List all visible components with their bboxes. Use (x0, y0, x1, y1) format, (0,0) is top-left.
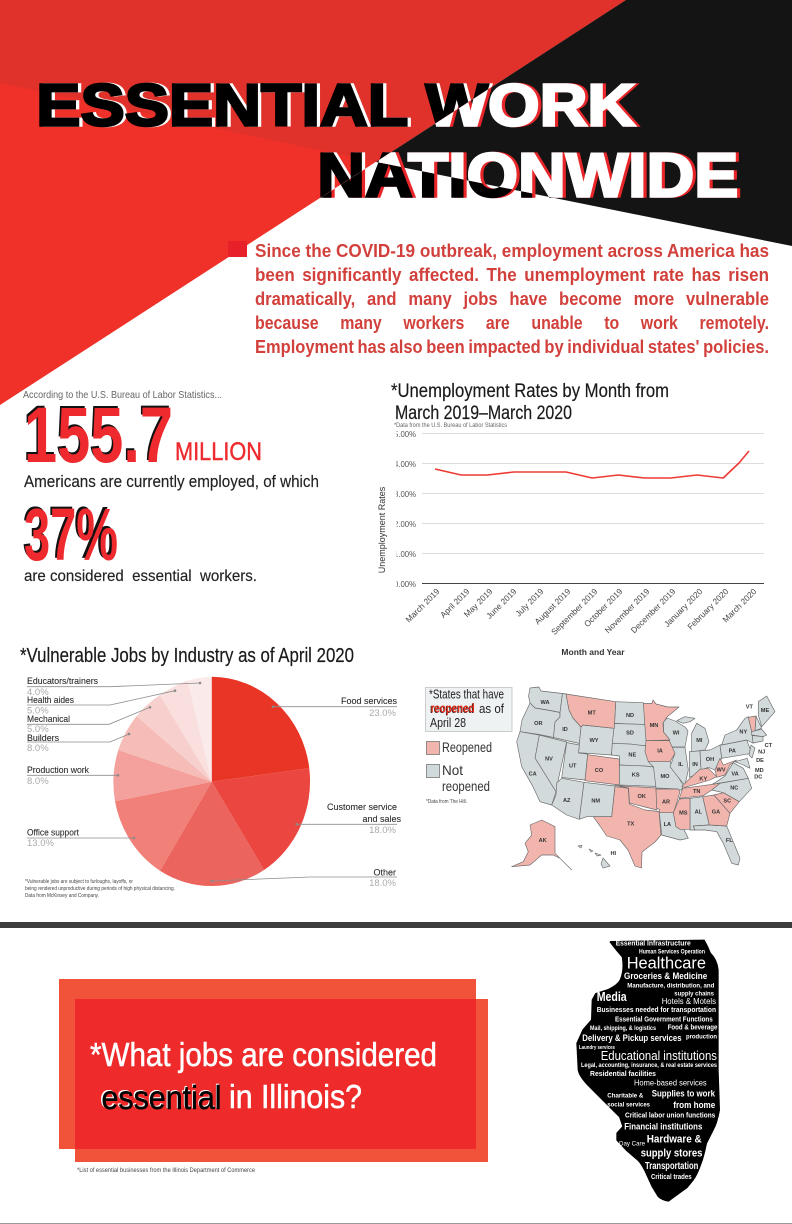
big number 37% (22, 491, 118, 576)
word cloud terms: Manufacture, distribution, and (627, 983, 714, 990)
state abbreviations: NV (545, 756, 553, 762)
state abbreviations: NJ (758, 750, 765, 756)
title: ESSENTIAL WORK (40, 73, 639, 139)
word cloud terms: Human Services Operation (639, 949, 705, 955)
essential workers sentence: are considered essential workers. (24, 568, 257, 585)
y axis labels: 0.00% (394, 579, 416, 589)
word cloud terms: production (686, 1033, 717, 1040)
pie label: educators/trainers: 4.0% (27, 687, 49, 698)
state abbreviations: TN (693, 789, 700, 795)
state abbreviations (529, 700, 773, 857)
gridlines and axis (422, 434, 764, 584)
word cloud terms: Food & beverage (668, 1024, 717, 1031)
word cloud terms: from home (673, 1100, 715, 1111)
legend: Not (442, 762, 463, 778)
word cloud terms: Transportation (645, 1161, 698, 1172)
pie label: mechanical: Mechanical (27, 714, 70, 724)
pie footnote (25, 879, 175, 899)
state abbreviations: SC (723, 799, 731, 805)
state abbreviations: NE (628, 752, 636, 758)
x axis labels: November 2019 (603, 586, 652, 635)
word cloud terms: Day Care (619, 1141, 645, 1148)
pie label: mechanical: 5.0% (27, 724, 49, 735)
pie label: health aides: 5.0% (27, 706, 49, 716)
state abbreviations: ME (761, 708, 769, 714)
title: NATIONWIDE (317, 142, 738, 211)
word cloud terms: Hotels & Motels (662, 997, 716, 1006)
pie label: food services (341, 696, 397, 719)
state abbreviations: AL (695, 810, 703, 816)
pie title: *Vulnerable Jobs by Industry as of April 2020 (20, 645, 354, 667)
state abbreviations: LA (664, 822, 671, 828)
x axis labels: October 2019 (582, 586, 625, 629)
pie label: educators/trainers (27, 676, 98, 698)
title: ESSENTIAL WORK (36, 73, 636, 139)
y axis labels (396, 431, 416, 587)
state abbreviations: TX (627, 821, 635, 827)
x axis labels: September 2019 (549, 586, 600, 637)
chart title: *Unemployment Rates by Month from (391, 381, 669, 402)
pie footnote: being rendered unproductive during periods of high physical distancing. (25, 886, 175, 892)
word cloud terms: Legal, accounting, insurance, & real estate services (581, 1063, 718, 1069)
pie label: educators/trainers: Educators/trainers (27, 676, 98, 686)
title: ESSENTIAL WORK (36, 73, 636, 139)
word cloud terms: Supplies to work (652, 1089, 716, 1099)
intro paragraph (255, 240, 769, 357)
word cloud terms: Educational institutions (601, 1048, 717, 1063)
panel: reopened states map (426, 686, 775, 870)
pie label: customer service and sales: Customer service (327, 802, 397, 812)
word cloud terms: Healthcare (627, 954, 706, 972)
legend: *Data from The Hill. (426, 799, 467, 805)
pie label: office support: 13.0% (27, 838, 54, 849)
pie label: customer service and sales: and sales (362, 814, 401, 824)
word cloud terms: Financial institutions (624, 1121, 702, 1132)
pie label: health aides: Health aides (27, 695, 74, 705)
state abbreviations: MS (679, 810, 688, 816)
pie label: builders (27, 733, 59, 754)
state abbreviations: GA (712, 810, 720, 816)
question text: essential (102, 1079, 222, 1116)
state abbreviations: VA (731, 771, 739, 777)
y axis labels: 1.00% (394, 549, 416, 559)
state abbreviations: WV (716, 767, 726, 773)
x axis labels: August 2019 (532, 586, 573, 626)
x axis labels: December 2019 (629, 586, 678, 635)
state abbreviations: ND (626, 713, 634, 719)
pie label: office support (27, 828, 79, 849)
state abbreviations: CA (529, 771, 537, 777)
pie footnote: *Vulnerable jobs are subject to furloughs, layoffs, or (25, 879, 133, 885)
x axis labels: June 2019 (484, 586, 519, 621)
x axis labels: July 2019 (513, 586, 546, 619)
title: NATIONWIDE (320, 142, 742, 211)
callout footnote: *List of essential businesses from the Illinois Department of Commerce (77, 1168, 256, 1174)
big number 155.7 million: MILLION (175, 438, 262, 466)
state abbreviations: IL (678, 762, 684, 768)
back red rectangle (59, 979, 476, 1149)
state abbreviations: UT (569, 764, 577, 770)
y axis title: Unemployment Rates (377, 486, 387, 573)
word cloud terms: Media (597, 989, 627, 1004)
state abbreviations: WI (673, 730, 680, 736)
chart title (391, 381, 669, 424)
x axis labels: March 2020 (720, 586, 759, 624)
state abbreviations: OH (706, 757, 714, 763)
x axis labels: February 2020 (685, 586, 731, 632)
state abbreviations: FL (726, 838, 733, 844)
pie label: production work: Production work (27, 765, 89, 775)
pie label: production work (27, 765, 89, 787)
title: ESSENTIAL WORK (40, 73, 639, 139)
x axis labels (403, 586, 759, 637)
state abbreviations: MD (755, 768, 764, 774)
word cloud terms: Mail, shipping, & logistics (590, 1026, 657, 1032)
state abbreviations: PA (729, 749, 736, 755)
section divider bar (0, 922, 792, 928)
state abbreviations: CT (765, 743, 773, 749)
big number 37%: 37% (22, 491, 115, 574)
intro square accent (228, 241, 247, 257)
word cloud terms: Businesses needed for transportation (597, 1005, 716, 1014)
state abbreviations: MO (660, 774, 670, 780)
title: NATIONWIDE (320, 142, 742, 211)
title: NATIONWIDE (320, 142, 742, 211)
state abbreviations: OK (638, 794, 646, 800)
Illinois silhouette (577, 941, 719, 1201)
header background shapes (0, 0, 792, 405)
title: NATIONWIDE (317, 142, 738, 211)
x axis labels: May 2019 (462, 586, 495, 619)
map heading box: reopened (431, 700, 475, 716)
big number 155.7 million: 155.7 (24, 390, 173, 479)
word cloud terms: supply chains (674, 991, 714, 998)
word cloud terms: Residential facilities (590, 1069, 656, 1078)
word cloud terms: Charitable & (607, 1093, 644, 1100)
pie label: production work: 8.0% (27, 776, 49, 787)
pie label: customer service and sales: 18.0% (369, 825, 397, 836)
word cloud terms: Groceries & Medicine (624, 971, 707, 982)
word cloud terms: Delivery & Pickup services (582, 1033, 682, 1044)
state abbreviations: NM (591, 799, 600, 805)
title (39, 82, 740, 198)
state abbreviations: WA (540, 700, 550, 706)
state abbreviations: DE (756, 758, 764, 764)
state abbreviations: SD (626, 731, 634, 737)
page bottom rule (0, 1223, 792, 1224)
state abbreviations: OR (534, 721, 542, 727)
panel: Illinois word cloud (577, 941, 719, 1201)
map heading box: reopened (430, 701, 474, 716)
pie label: other (369, 868, 397, 889)
map heading box: *States that have (429, 686, 504, 702)
pie label: office support: Office support (27, 828, 79, 838)
pie label: builders: 8.0% (27, 743, 49, 754)
not reopened states (517, 687, 775, 868)
pie label: builders: Builders (27, 733, 59, 743)
reopened states (512, 694, 756, 870)
state abbreviations: NC (730, 785, 738, 791)
chart source note: *Data from the U.S. Bureau of Labor Statistics (394, 422, 508, 429)
rectangle overlap (75, 999, 476, 1149)
word cloud terms: Hardware & (647, 1134, 702, 1146)
unemployment line (435, 451, 749, 478)
state abbreviations: ID (562, 727, 568, 733)
state abbreviations: AZ (563, 798, 571, 804)
pie slices (113, 677, 310, 886)
y axis labels: 4.00% (394, 459, 416, 469)
state abbreviations: DC (754, 775, 762, 781)
question text: *What jobs are considered (90, 1036, 437, 1073)
y axis labels: 3.00% (394, 489, 416, 499)
x axis title: Month and Year (561, 647, 625, 657)
big number 37%: 37% (24, 493, 118, 576)
state abbreviations: MN (650, 723, 658, 729)
pie label: other: Other (373, 868, 396, 878)
chart title: March 2019–March 2020 (395, 403, 572, 424)
state abbreviations: MI (696, 738, 703, 744)
legend (426, 739, 492, 805)
x axis labels: April 2019 (438, 586, 472, 620)
state abbreviations: CO (595, 768, 604, 774)
question text: in Illinois? (229, 1078, 362, 1115)
big number 155.7 million: 155.7 (22, 388, 172, 477)
panel: Illinois question callout (59, 979, 488, 1162)
pie footnote: Data from McKinsey and Company. (25, 893, 99, 899)
state abbreviations: IN (692, 762, 698, 768)
map heading box: as of (479, 701, 504, 716)
state abbreviations: NY (739, 730, 747, 736)
x axis labels: January 2020 (662, 586, 705, 629)
legend: Reopened (442, 739, 492, 755)
pie label: customer service and sales (327, 802, 401, 836)
word cloud terms: social services (607, 1102, 650, 1109)
leader lines (27, 682, 397, 882)
word cloud terms: Critical labor union functions (625, 1113, 715, 1120)
legend: reopened (442, 778, 490, 794)
panel: employment stats (22, 388, 319, 585)
word cloud terms: Essential Infrastructure (616, 941, 691, 948)
state abbreviations: KS (632, 772, 640, 778)
y axis labels: 5.00% (394, 429, 416, 439)
word cloud terms (579, 941, 718, 1181)
word cloud terms: Essential Government Functions (615, 1016, 713, 1023)
employed sentence: Americans are currently employed, of which (24, 473, 319, 491)
source line: According to the U.S. Bureau of Labor Statistics... (23, 389, 222, 401)
pie label: food services: 23.0% (369, 708, 397, 719)
word cloud terms: supply stores (641, 1148, 702, 1160)
map heading box: April 28 (430, 715, 466, 730)
pie label: health aides (27, 695, 74, 716)
map heading box (426, 686, 512, 732)
state abbreviations: IA (657, 749, 663, 755)
word cloud terms: Critical trades (651, 1174, 692, 1181)
y axis labels: 2.00% (394, 519, 416, 529)
front red rectangle (75, 999, 488, 1162)
word cloud terms: Laundry services (579, 1045, 615, 1051)
panel: vulnerable jobs pie chart (20, 645, 401, 899)
panel: unemployment line chart (377, 381, 764, 657)
pie label: food services: Food services (341, 696, 397, 706)
question text: essential (100, 1078, 221, 1115)
word cloud terms: Home-based services (634, 1079, 707, 1088)
state abbreviations: AK (539, 838, 547, 844)
pie label: other: 18.0% (369, 878, 397, 889)
US map (512, 687, 775, 870)
pie label: mechanical (27, 714, 70, 735)
state abbreviations: MT (588, 711, 596, 717)
state abbreviations: KY (699, 776, 707, 782)
state abbreviations: HI (611, 851, 617, 857)
title: NATIONWIDE (317, 142, 738, 211)
state abbreviations: AR (662, 800, 670, 806)
question text (90, 1036, 437, 1116)
state abbreviations: VT (746, 705, 753, 711)
x axis labels: March 2019 (403, 586, 442, 624)
state abbreviations: WY (589, 738, 599, 744)
